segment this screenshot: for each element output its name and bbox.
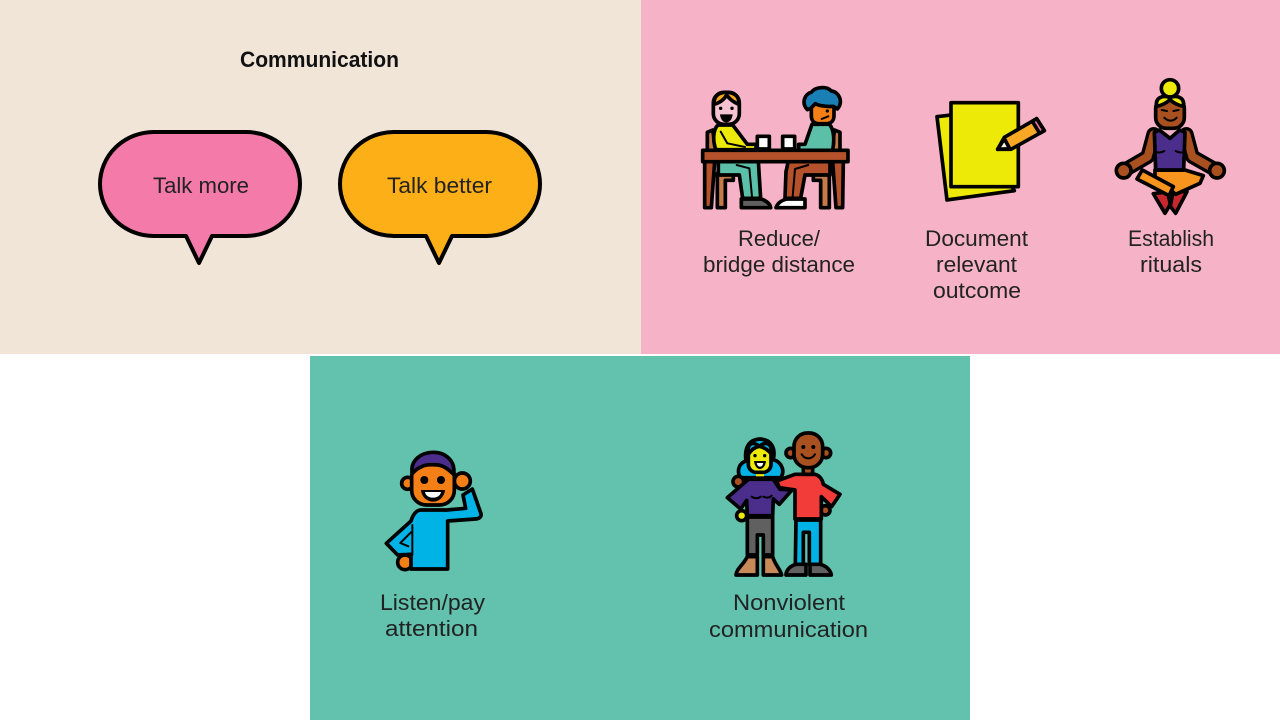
panel: communication — [0, 0, 641, 354]
label: document relevant outcome: relevant — [936, 252, 1017, 277]
arms — [1124, 134, 1217, 171]
speech bubble: talk better — [340, 132, 540, 263]
label: establish rituals — [1128, 226, 1214, 277]
man hand — [821, 506, 830, 515]
label: nonviolent communication: communication — [709, 617, 868, 642]
label: document relevant outcome: outcome — [933, 278, 1021, 303]
legs — [1142, 176, 1198, 192]
left person pants — [718, 161, 761, 198]
right person shoes — [776, 199, 805, 208]
label: listen or pay attention: Listen/pay — [380, 590, 485, 615]
heading: Communication: Communication — [240, 47, 399, 72]
label: establish rituals: Establish — [1128, 226, 1214, 251]
speech bubble: talk more — [100, 132, 300, 263]
icon: meditating woman — [1116, 80, 1224, 213]
label: establish rituals: rituals — [1140, 252, 1202, 277]
panel: listening — [310, 356, 970, 720]
right person head — [811, 103, 834, 124]
label: reduce or bridge distance — [703, 226, 855, 277]
man neck — [803, 466, 813, 474]
man shoes — [786, 564, 831, 575]
lower hand — [398, 555, 412, 570]
back sheet — [937, 113, 1014, 200]
label: reduce or bridge distance: bridge distance — [703, 252, 855, 277]
feet — [1153, 192, 1170, 213]
woman hair — [738, 439, 783, 478]
panel: practices — [641, 0, 1280, 354]
left person head — [713, 92, 739, 124]
right person pants — [785, 161, 830, 198]
man torso — [777, 474, 840, 519]
woman legs — [747, 517, 773, 555]
man head — [786, 448, 795, 458]
icon: person listening — [386, 452, 481, 570]
label: document relevant outcome — [925, 226, 1028, 303]
icon: paper and pencil — [937, 103, 1044, 200]
hair bun — [1161, 80, 1179, 97]
woman hand and arm end — [733, 476, 744, 487]
head — [412, 462, 454, 505]
left person shoes — [741, 199, 771, 208]
woman torso — [727, 479, 792, 516]
label: reduce or bridge distance: Reduce/ — [738, 226, 821, 251]
table — [705, 162, 843, 208]
front sheet — [951, 103, 1018, 187]
speech bubble: talk more: Talk more — [153, 173, 249, 198]
label: document relevant outcome: Document — [925, 226, 1028, 251]
pencil — [998, 119, 1044, 149]
torso — [1154, 130, 1185, 170]
label: nonviolent communication — [709, 590, 868, 642]
man legs — [795, 520, 821, 564]
chair backs and seats — [707, 130, 716, 151]
raised hand — [454, 473, 470, 489]
label: listen or pay attention — [380, 590, 485, 641]
ear — [402, 477, 414, 489]
hair — [412, 452, 454, 474]
head — [1156, 98, 1184, 128]
woman head — [748, 446, 771, 472]
body — [386, 489, 481, 569]
left person shirt — [714, 125, 756, 150]
icon: two people at a table — [703, 88, 848, 208]
label: listen or pay attention: attention — [385, 616, 478, 641]
speech bubble: talk better: Talk better — [387, 173, 492, 198]
woman boots — [736, 557, 782, 575]
cups — [757, 136, 769, 149]
label: nonviolent communication: Nonviolent — [733, 590, 845, 615]
icon: two friends — [727, 433, 840, 575]
right person shirt — [799, 124, 834, 150]
woman neck — [756, 472, 764, 476]
